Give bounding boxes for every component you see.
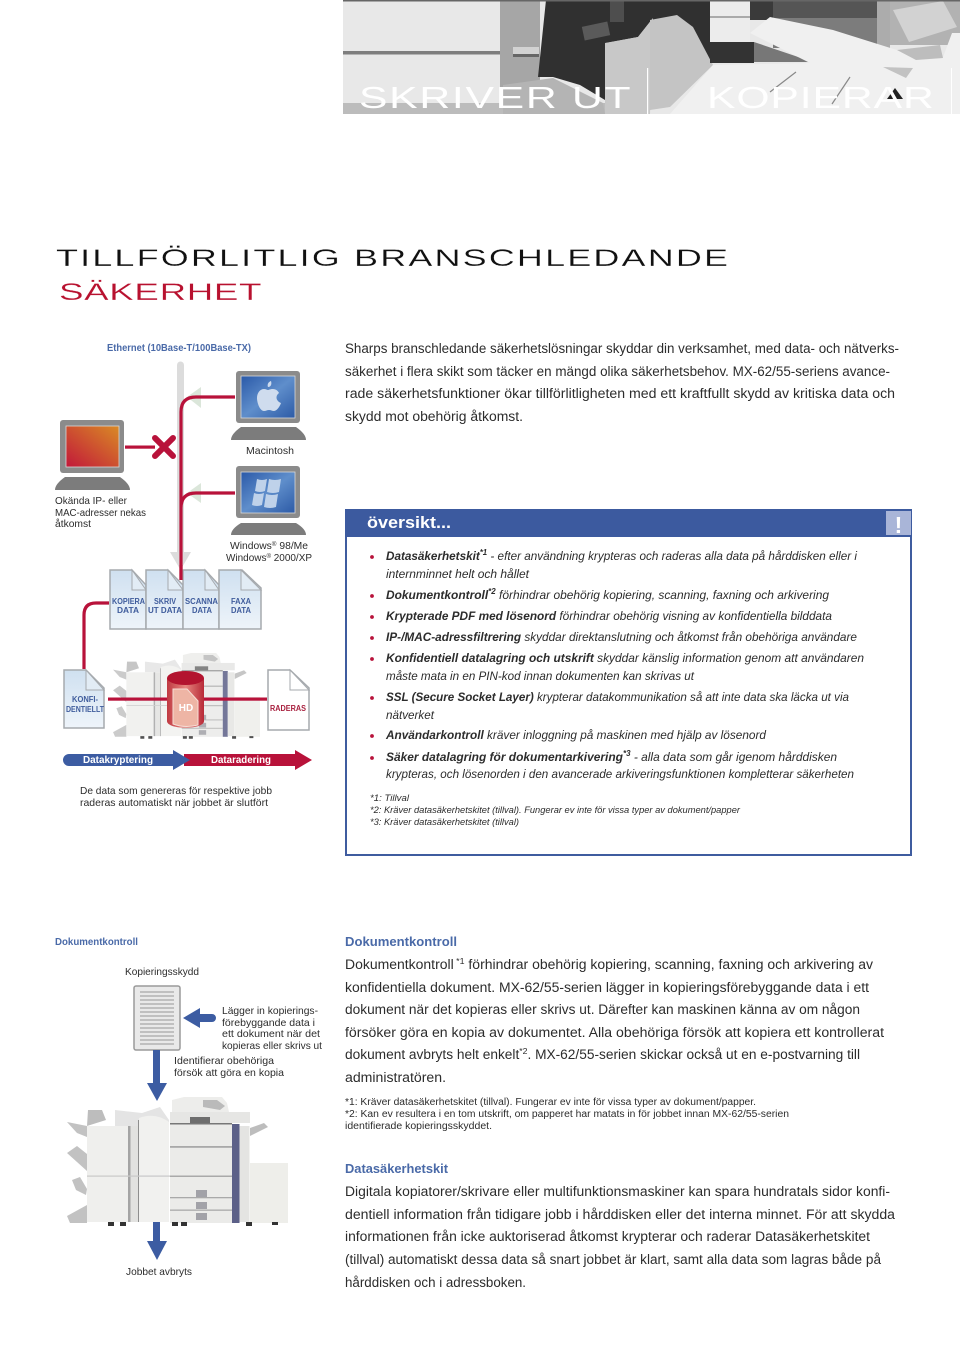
label: Windows: ® — [266, 552, 271, 560]
bullets — [370, 555, 374, 760]
panel footnotes: *2: Kräver datasäkerhetskitet (tillval). Fungerar ev inte för vissa typer av dokument/papper — [370, 805, 741, 816]
intro text: Sharps branschledande säkerhetslösningar skyddar din verksamhet, med data- och nätverks- — [345, 341, 899, 356]
section heading: Datasäkerhetskit — [345, 1161, 449, 1176]
section body — [345, 956, 884, 1085]
feature list: måste mata in en PIN-kod innan dokumenten kan skrivas ut — [386, 669, 695, 683]
feature list: krypteras, och lösenorden i den avancerade arkiveringsfunktionen kompletterar säkerheten — [386, 767, 854, 781]
intro text: rade säkerhetsfunktioner ökar tillförlitligheten med ett kraftfullt skydd av kritiska data och — [345, 386, 895, 401]
label: embeds data: kopieras eller skrivs ut — [222, 1040, 322, 1052]
section body: administratören. — [345, 1070, 446, 1085]
section body: *2 — [519, 1046, 528, 1056]
feature list: *1 — [480, 548, 488, 557]
feature list: *2 — [488, 587, 496, 596]
panel footnotes: *3: Kräver datasäkerhetskitet (tillval) — [370, 817, 519, 828]
label: Windows — [226, 540, 312, 564]
label: Windows: ® — [272, 540, 277, 548]
section footnotes — [345, 1097, 789, 1132]
label: Windows: 2000/XP — [271, 552, 312, 564]
header photo banner — [343, 0, 960, 114]
icon: apple — [257, 381, 281, 411]
document: RADERAS: RADERAS — [270, 703, 306, 713]
label: unknown addresses: Okända IP- eller — [55, 495, 127, 507]
label: Jobbet avbryts: Jobbet avbryts — [126, 1266, 192, 1278]
green direction arrows — [187, 387, 201, 503]
hard disk cylinder — [167, 671, 204, 728]
document: KOPIERA DATA: DATA — [117, 605, 139, 615]
label: Kopieringsskydd: Kopieringsskydd — [125, 966, 199, 978]
document: KONFIDENTIELLT: KONFI- — [72, 694, 98, 704]
feature list: - efter användning krypteras och raderas alla data på hårddisken eller i — [487, 549, 857, 563]
section body — [345, 1184, 896, 1290]
intro text: skydd mot obehörig åtkomst. — [345, 409, 523, 424]
arrow: job cancelled — [147, 1222, 167, 1260]
feature list: Datasäkerhetskit — [386, 549, 481, 563]
arrow: into document — [183, 1008, 216, 1028]
label: identifies attempts: försök att göra en kopia — [174, 1067, 284, 1079]
red line end over documents — [179, 565, 183, 580]
label: Windows: 98/Me — [277, 540, 308, 552]
panel footnotes: *1: Tillval — [370, 793, 410, 804]
ethernet backbone arrow — [170, 362, 191, 570]
section heading: Dokumentkontroll — [345, 934, 457, 949]
red line to confidential document — [84, 603, 109, 669]
section body: dentiell information från tidigare jobb i hårddisken eller det interna minnet. För att skydda — [345, 1207, 896, 1222]
feature list: *3 — [623, 749, 631, 758]
printer image — [67, 1097, 288, 1226]
feature list — [385, 548, 864, 781]
arrow: down to printer — [147, 1050, 167, 1101]
label: embeds data: ett dokument när det — [222, 1028, 320, 1040]
ethernet label: Ethernet (10Base-T/100Base-TX) — [107, 342, 251, 354]
intro text: säkerhet i flera skikt som täcker en mängd olika säkerhetsbehov. MX-62/55-seriens avance- — [345, 364, 890, 379]
printer image — [113, 653, 260, 739]
caption: data deletion: raderas automatiskt när jobbet är slutfört — [80, 797, 268, 809]
document: SKRIV UT DATA: SKRIV — [154, 596, 176, 606]
label: Macintosh: Macintosh — [246, 445, 294, 457]
panel header bar — [345, 509, 912, 537]
document: KOPIERA DATA — [110, 570, 146, 629]
label: identifies attempts — [174, 1055, 284, 1079]
red data line — [108, 698, 267, 701]
document: FAXA DATA: FAXA — [231, 596, 251, 606]
arrow: Dataradering — [184, 750, 312, 770]
label: unknown addresses — [55, 495, 146, 530]
feature list: Konfidentiell datalagring och utskrift skyddar känslig information genom att användaren — [386, 651, 864, 665]
label: unknown addresses: MAC-adresser nekas — [55, 507, 146, 519]
section footnotes: identifierade kopieringsskyddet. — [345, 1121, 492, 1132]
section body: förhindrar obehörig kopiering, scanning, faxning och arkivering av — [465, 957, 873, 972]
feature list: Dokumentkontroll — [386, 588, 489, 602]
section: Dokumentkontroll — [345, 934, 884, 1132]
section: Datasäkerhetskit — [345, 1161, 896, 1290]
header words: SKRIVER UT / KOPIERAR: SKRIVER UT — [359, 80, 631, 115]
panel footnotes — [370, 793, 741, 828]
label: embeds data: Lägger in kopierings- — [222, 1005, 318, 1017]
panel: översikt — [345, 509, 912, 855]
document: KONFIDENTIELLT — [64, 670, 105, 728]
monitor: unknown address — [55, 420, 130, 490]
arrow: Datakryptering: Datakryptering — [83, 754, 153, 766]
section body: dokument avbryts helt enkelt — [345, 1047, 515, 1062]
feature list: Användarkontroll kräver inloggning på maskinen med hjälp av lösenord — [385, 728, 766, 742]
document: FAXA DATA — [219, 570, 261, 629]
monitor: Macintosh — [231, 371, 306, 440]
icon: windows flag — [252, 479, 281, 508]
panel frame — [346, 510, 911, 855]
section body: dokument när det kopieras eller skrivs ut. Därefter kan maskinen känna av om någon — [345, 1002, 860, 1017]
document: RADERAS — [268, 670, 309, 730]
section footnotes: *2: Kan ev resultera i en tom utskrift, om papperet har matats in för jobbet innan MX-62/55-serien — [345, 1109, 789, 1120]
feature list: IP-/MAC-adressfiltrering skyddar direktanslutning och åtkomst från obehöriga användare — [386, 630, 857, 644]
caption: data deletion: De data som genereras för respektive jobb — [80, 785, 272, 797]
panel heading: översikt... — [367, 514, 451, 532]
document: FAXA DATA: DATA — [231, 605, 251, 615]
feature list: SSL (Secure Socket Layer) krypterar datakommunikation så att inte data ska läcka ut via — [386, 690, 849, 704]
section body: . MX-62/55-serien skickar också ut en e-postvarning till — [527, 1047, 860, 1062]
section body: Dokumentkontroll — [345, 957, 449, 972]
diagram heading: Dokumentkontroll — [55, 936, 138, 948]
section body: informationen från icke auktoriserad åtkomst krypterar och raderar Datasäkerhetskitet — [345, 1229, 870, 1244]
intro text — [345, 341, 899, 424]
feature list: - alla data som går igenom hårddisken — [631, 750, 837, 764]
caption: data deletion — [80, 785, 272, 809]
feature list: förhindrar obehörig kopiering, scanning, faxning och arkivering — [496, 588, 829, 602]
document: SCANNA DATA — [183, 570, 219, 629]
arrow: Datakryptering — [63, 750, 190, 770]
document: SCANNA DATA: DATA — [192, 605, 212, 615]
document: SKRIV UT DATA — [146, 570, 183, 629]
label: Windows: Windows — [226, 552, 269, 564]
section body: hårddisken och i adressboken. — [345, 1275, 526, 1290]
document: KONFIDENTIELLT: DENTIELLT — [66, 704, 105, 714]
document: KOPIERA DATA: KOPIERA — [112, 596, 145, 606]
section footnotes: *1: Kräver datasäkerhetskitet (tillval). Fungerar ev inte för vissa typer av dokument/papper. — [345, 1097, 756, 1108]
section body: *1 — [454, 956, 465, 966]
document control diagram — [55, 936, 322, 1278]
header words: SKRIVER UT / KOPIERAR — [359, 68, 952, 115]
label: embeds data — [222, 1005, 322, 1052]
monitor: Windows — [231, 466, 306, 535]
section body: försöker göra en kopia av dokumentet. Alla obehöriga försök att kopiera ett kontrollerat — [345, 1025, 884, 1040]
protected document icon — [134, 986, 180, 1050]
document: SCANNA DATA: SCANNA — [185, 596, 218, 606]
exclamation badge — [886, 511, 911, 538]
header words: SKRIVER UT / KOPIERAR: KOPIERAR — [707, 80, 934, 115]
red connection lines — [181, 397, 235, 580]
arrow: Dataradering: Dataradering — [211, 754, 271, 766]
label: identifies attempts: Identifierar obehöriga — [174, 1055, 274, 1067]
blocked connection with X — [125, 438, 173, 456]
hard disk cylinder: HD — [179, 703, 193, 714]
label: embeds data: förebyggande data i — [222, 1017, 315, 1029]
feature list: Krypterade PDF med lösenord förhindrar obehörig visning av konfidentiella bilddata — [386, 609, 832, 623]
section body: Digitala kopiatorer/skrivare eller multifunktionsmaskiner kan spara hundratals sidor konfi- — [345, 1184, 890, 1199]
label: unknown addresses: åtkomst — [55, 518, 91, 530]
title: SÄKERHET — [59, 278, 262, 305]
network diagram — [55, 342, 312, 580]
title: TILLFÖRLITLIG BRANSCHLEDANDE — [56, 245, 728, 271]
section body: (tillval) automatiskt dessa data så snart jobbet är klart, samt alla data som lagras både på — [345, 1252, 882, 1267]
label: Windows: Windows — [230, 540, 273, 552]
feature list: internminnet helt och hållet — [386, 567, 530, 581]
exclamation badge: ! — [895, 512, 902, 538]
title — [56, 245, 728, 305]
data flow diagram — [63, 565, 312, 809]
section body: konfidentiella dokument. MX-62/55-serien lägger in kopieringsförebyggande data i ett — [345, 980, 869, 995]
document: SKRIV UT DATA: UT DATA — [148, 605, 182, 615]
feature list: Säker datalagring för dokumentarkivering — [386, 750, 624, 764]
feature list: nätverket — [386, 708, 435, 722]
